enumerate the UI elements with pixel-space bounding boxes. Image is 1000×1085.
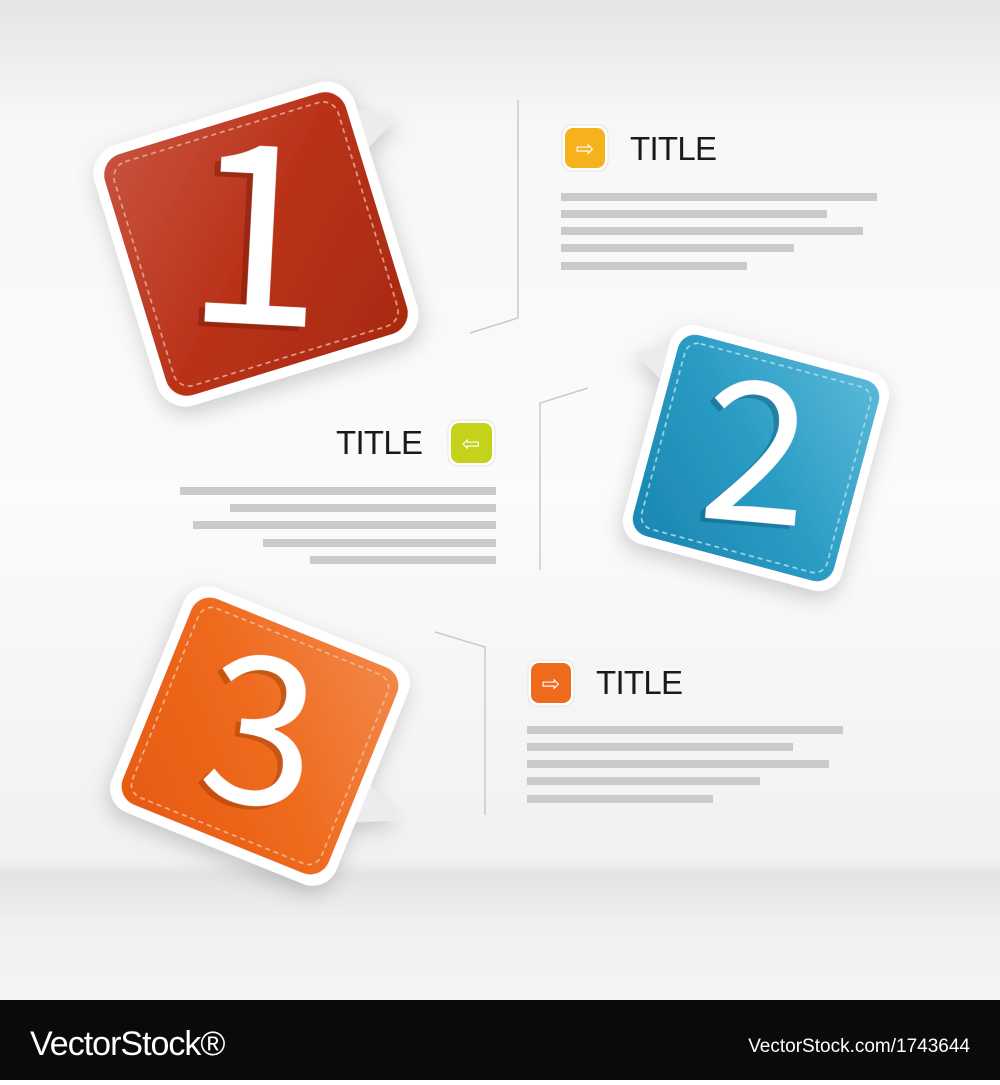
block 1: ⇨: [576, 136, 594, 161]
block 2: ⇦: [462, 431, 480, 456]
block 2: [180, 420, 496, 564]
sticker 2: 2: [692, 293, 824, 583]
block 1: [561, 125, 877, 270]
bottom bar: VectorStock®: [30, 1025, 225, 1063]
bottom bar: [0, 1000, 1000, 1080]
block 3: ⇨: [542, 671, 560, 696]
sticker 2: [581, 258, 909, 616]
sticker 1: 1: [179, 31, 336, 399]
sticker 2: 2: [686, 296, 819, 587]
block 2: TITLE: [336, 424, 423, 461]
sticker 1: [61, 0, 469, 448]
block 3: TITLE: [596, 664, 683, 701]
bottom bar: VectorStock.com/1743644: [748, 1036, 970, 1057]
block 1: TITLE: [630, 130, 717, 167]
connector lines: [435, 100, 588, 815]
sticker 3: 3: [188, 561, 337, 870]
sticker 1: 1: [173, 35, 330, 404]
sticker 3: [94, 526, 477, 930]
block 3: [527, 660, 843, 803]
sticker 3: 3: [182, 565, 332, 873]
